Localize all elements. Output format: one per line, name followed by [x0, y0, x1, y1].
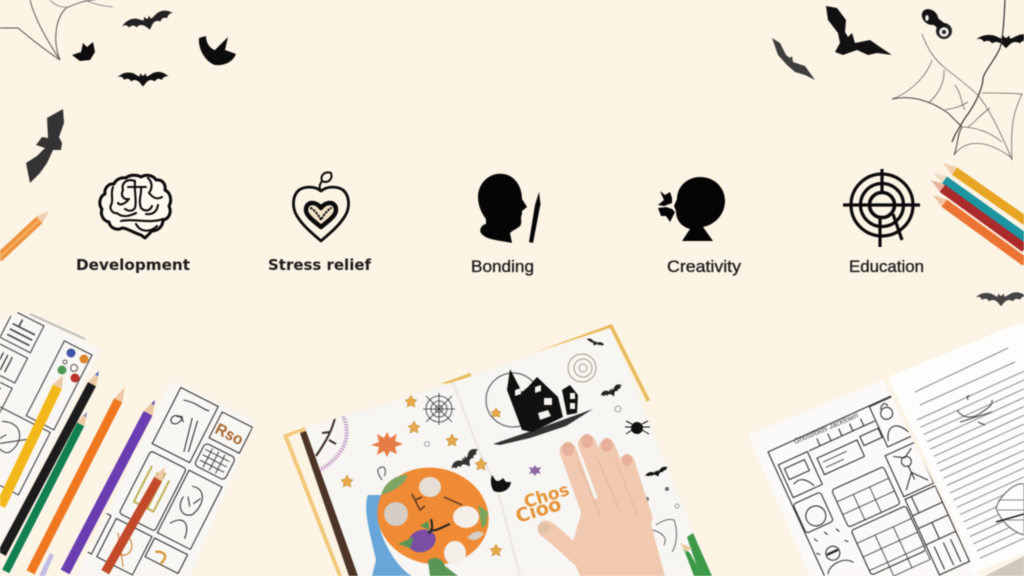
spider web: top left — [0, 0, 113, 60]
bat: far top right — [976, 34, 1024, 48]
label: Bonding: Bonding — [471, 257, 534, 276]
small green pencils on book — [687, 533, 712, 576]
worksheet: second left — [77, 380, 254, 576]
label: Development: Development — [76, 256, 190, 274]
blue ribbon — [366, 495, 412, 576]
page title text: Chos — [522, 480, 572, 513]
notebook: right spread — [748, 322, 1024, 576]
bat: far right lower — [976, 292, 1024, 306]
label: Education: Education — [849, 257, 924, 276]
icon: heart with leaf — [293, 172, 349, 241]
notebook heading text: Ghostfolds Jacktown — [792, 411, 859, 446]
book: centre open book: Cioo — [513, 493, 564, 528]
notebook right page — [888, 322, 1024, 574]
notebook comic panels — [768, 394, 969, 576]
icon: brain — [100, 175, 171, 238]
pencil: top left — [0, 208, 52, 261]
page crescent — [491, 475, 511, 492]
bat: top left lower — [118, 72, 168, 87]
hand — [538, 434, 665, 576]
left page doodles — [316, 418, 336, 456]
pencils: bottom left group — [0, 369, 169, 576]
icon: head with starburst — [658, 177, 725, 241]
bat: large left — [26, 109, 64, 183]
label: Creativity: Creativity — [667, 257, 742, 276]
pencils: right cluster — [928, 159, 1024, 266]
bat: top right grey — [772, 38, 815, 80]
spider web: top right — [892, 0, 1022, 160]
crescent bat: small — [72, 42, 95, 61]
house on hill — [486, 369, 593, 445]
book: centre open book: ge — [603, 449, 636, 477]
bat: top right large — [826, 6, 892, 55]
bat: top left upper — [121, 8, 176, 36]
red starburst — [371, 432, 403, 457]
worksheet: second left: Rso — [212, 421, 246, 449]
book: centre open book — [283, 324, 712, 576]
paper pumpkin — [376, 466, 490, 576]
notebook ruled lines — [915, 348, 1024, 558]
googly eye bat — [919, 6, 952, 39]
icon: target — [843, 169, 920, 247]
crescent bat: large — [199, 36, 236, 65]
worksheet: far left — [0, 308, 100, 560]
book cover and page edges — [283, 427, 360, 576]
stars — [341, 393, 502, 556]
icon: head with pen — [478, 174, 540, 243]
spider — [625, 421, 650, 434]
tiny outlined stars — [424, 405, 680, 509]
small bats on page — [586, 338, 605, 346]
spiral — [568, 354, 596, 382]
spider web on page — [423, 393, 455, 425]
label: Stress relief: Stress relief — [268, 256, 371, 274]
notebook doodles — [957, 396, 1024, 535]
notebook left page — [748, 380, 980, 576]
